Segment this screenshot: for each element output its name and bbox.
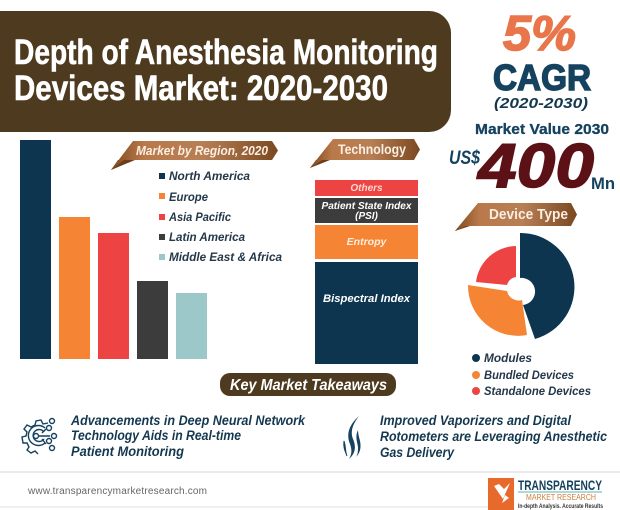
- takeaway text: vaporizers: Improved Vaporizers and Digital: [380, 413, 571, 428]
- key market takeaways heading: [220, 373, 396, 396]
- stacked bar: technology: Bispectral Index: [323, 293, 411, 305]
- legend: regions: Middle East & Africa: [169, 250, 282, 264]
- title banner: Depth of Anesthesia Monitoring: [14, 33, 438, 72]
- takeaway text: vaporizers: Rotometers are Leveraging Anesthetic: [380, 429, 607, 444]
- stacked bar: technology: [315, 180, 418, 364]
- legend: regions: Latin America: [169, 230, 245, 244]
- legend: device types: Standalone Devices: [484, 384, 591, 398]
- title banner: [0, 11, 451, 132]
- ribbon heading: technology: Technology: [338, 141, 406, 157]
- website url: www.transparencymarketresearch.com: [27, 486, 207, 497]
- ribbon heading: technology: [310, 139, 420, 168]
- stacked bar: technology: Others: [350, 183, 383, 194]
- legend: device types: Bundled Devices: [484, 368, 574, 382]
- takeaway text: neural network: Advancements in Deep Neural Network: [70, 413, 306, 428]
- legend: regions: North America: [169, 169, 250, 183]
- legend: regions: Europe: [169, 190, 208, 204]
- title banner: Devices Market: 2020-2030: [14, 69, 388, 108]
- takeaway text: vaporizers: Gas Delivery: [380, 445, 455, 460]
- takeaway text: neural network: Technology Aids in Real-time: [71, 428, 241, 443]
- legend: device types: Modules: [484, 351, 532, 365]
- stacked bar: technology: Patient State Index: [322, 201, 412, 212]
- pie chart: device type: [468, 233, 574, 339]
- icon: neural network gear: [22, 418, 56, 454]
- stacked bar: technology: Entropy: [347, 236, 387, 248]
- bar chart: market by region: [20, 140, 207, 359]
- market value callout: Mn: [591, 174, 615, 193]
- legend: regions: [159, 169, 282, 264]
- takeaway text: neural network: Patient Monitoring: [71, 444, 185, 459]
- takeaway text: neural network: [70, 413, 306, 459]
- legend: regions: Asia Pacific: [168, 210, 231, 224]
- market value callout: US$: [449, 148, 480, 169]
- stacked bar: technology: (PSI): [355, 211, 379, 222]
- takeaway text: vaporizers: [380, 413, 607, 460]
- CAGR callout: 5%: [503, 7, 576, 61]
- legend: device types: [472, 351, 591, 398]
- logo: transparency market research: MARKET RESEARCH: [526, 493, 596, 502]
- logo: transparency market research: [488, 477, 603, 510]
- CAGR callout: [493, 7, 591, 112]
- CAGR callout: (2020-2030): [494, 95, 588, 112]
- market value callout: [449, 122, 615, 201]
- ribbon heading: device type: [455, 203, 577, 231]
- CAGR callout: CAGR: [493, 57, 591, 98]
- market value callout: 400: [476, 132, 594, 201]
- ribbon heading: market by region: Market by Region, 2020: [136, 144, 268, 158]
- ribbon heading: market by region: [111, 141, 278, 170]
- market value callout: Market Value 2030: [475, 122, 609, 138]
- ribbon heading: device type: Device Type: [489, 207, 568, 223]
- key market takeaways heading: Key Market Takeaways: [230, 377, 387, 394]
- icon: anesthetic gas vapor: [344, 416, 361, 459]
